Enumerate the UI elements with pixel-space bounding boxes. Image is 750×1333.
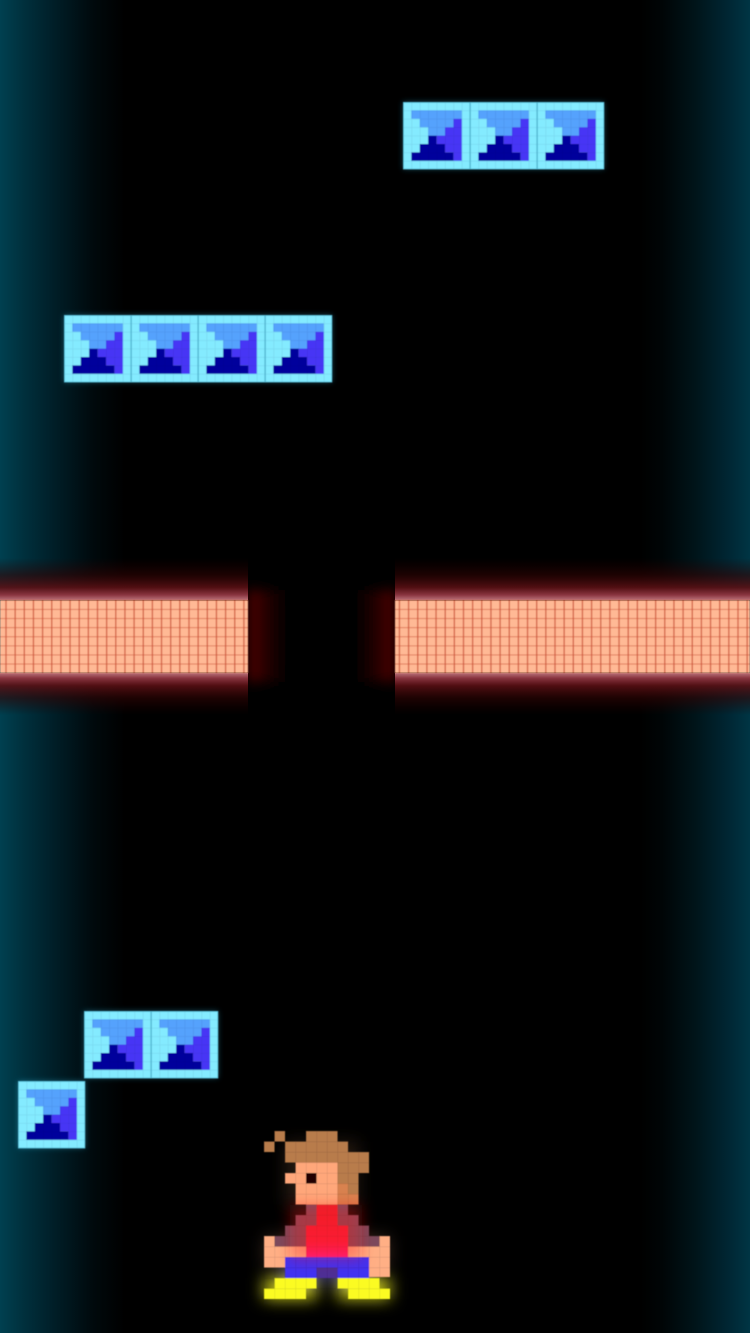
pixel grid (264, 1131, 390, 1299)
eye (306, 1173, 316, 1184)
platform: lower two blocks (84, 1011, 218, 1078)
sideburn (338, 1184, 358, 1204)
hair (264, 1131, 369, 1194)
hands (264, 1236, 390, 1277)
barrier glow: above right (395, 558, 750, 600)
barrier glow: gap edge left (248, 590, 292, 682)
barrier glow: below right (395, 673, 750, 715)
barrier segment: right (395, 600, 750, 673)
character pixels (264, 1131, 390, 1299)
torso red glow (290, 1205, 362, 1260)
barrier segment: left (0, 600, 248, 673)
platform: single lower-left block (18, 1081, 85, 1148)
face (285, 1162, 338, 1204)
character glow (264, 1142, 390, 1299)
background: right side glow (640, 0, 750, 1333)
shoes (264, 1278, 390, 1299)
crotch (316, 1268, 338, 1278)
barrier glow: above left (0, 558, 248, 600)
background: left side glow (0, 0, 125, 1333)
platform: top three blocks (403, 102, 604, 169)
barrier glow: below left (0, 673, 248, 715)
platform: middle four blocks (64, 315, 332, 382)
trousers (285, 1257, 369, 1278)
jacket (274, 1204, 380, 1257)
shirt (306, 1204, 348, 1257)
laser barrier with gap (0, 558, 750, 715)
pixel character (264, 1131, 390, 1299)
barrier glow: gap edge right (351, 590, 395, 682)
